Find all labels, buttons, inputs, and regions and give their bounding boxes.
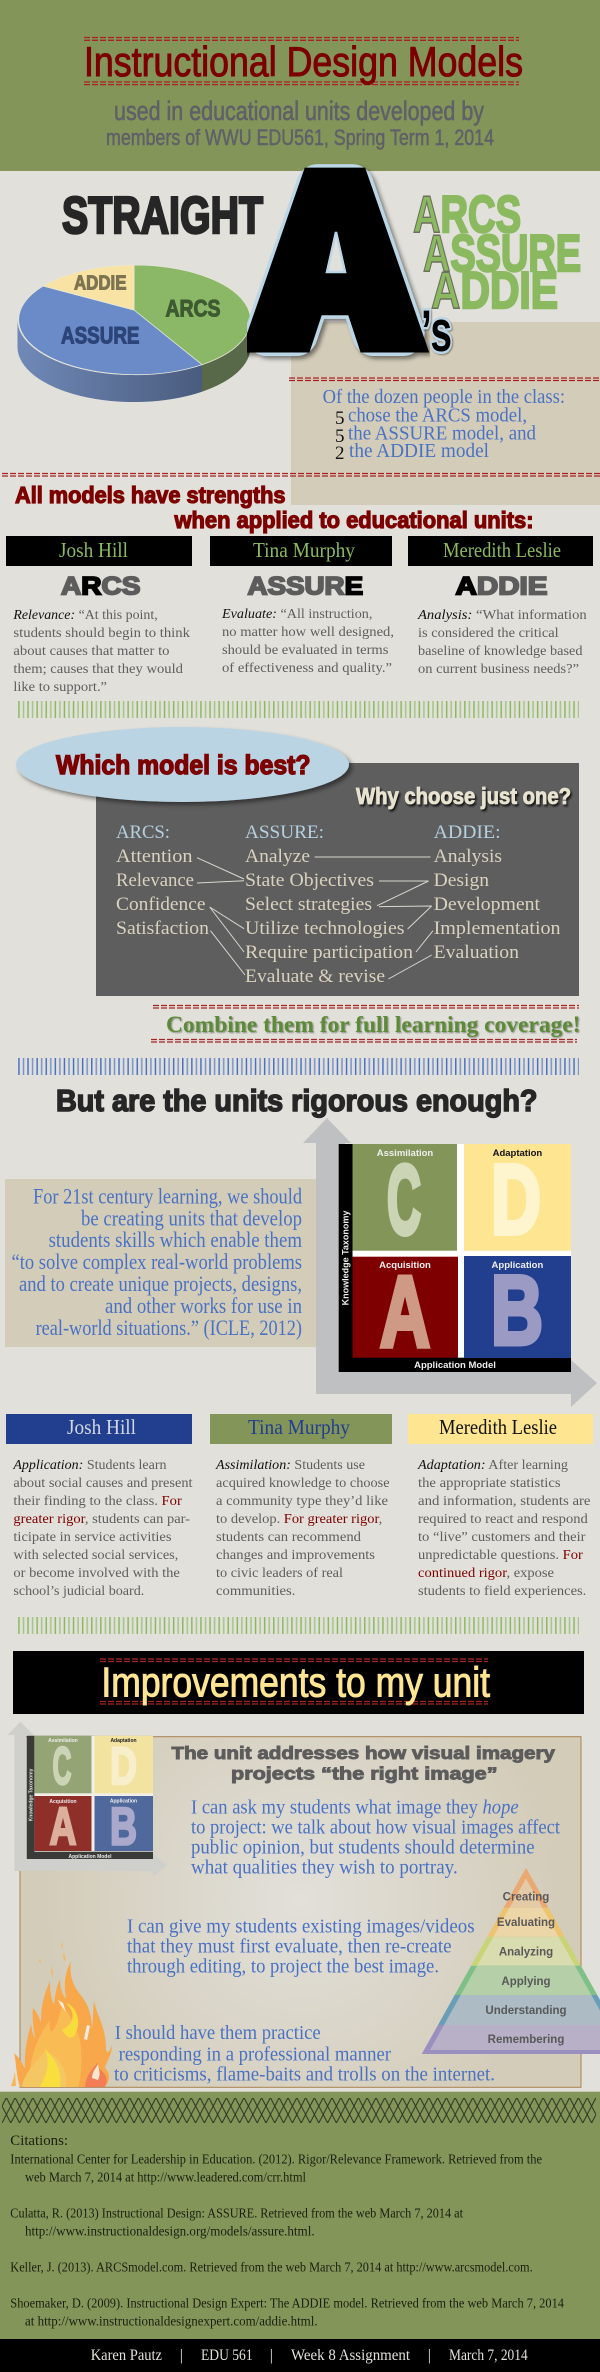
description: students can recommend [216,1530,361,1545]
column: ARCS: Attention [116,846,193,867]
quote: no matter how well designed, [222,625,394,640]
heading: strengths [15,482,534,533]
description: to develop. For greater rigor, [216,1512,382,1527]
small quadrant C: C [52,1737,72,1796]
icon: flames [11,1942,112,2087]
quote: students should begin to think [13,626,190,641]
quote [12,608,190,695]
small quadrant A: Acquisition [49,1799,77,1805]
name bar: Josh Hill [59,538,128,562]
paragraph: evaluate: that they must first evaluate, then re-create [127,1937,452,1958]
quote [221,607,394,676]
citation: Culatta [10,2205,463,2238]
quadrant D: Adaptation [493,1148,542,1159]
model name: ADDIE [456,572,548,600]
panel heading: The unit addresses how visual imagery [172,1743,555,1763]
citation: Keller: Keller, J. (2013). ARCSmodel.com. Retrieved from the web March 7, 2014 at http://www.arcsmodel.com. [10,2259,533,2274]
column: Meredith Leslie Adaptation [408,1414,593,1599]
heading banner: improvements: Improvements to my unit [101,1659,490,1706]
level: Analyzing [471,1937,581,1966]
small axis label: Knowledge Taxonomy: Knowledge Taxonomy [28,1768,34,1821]
quadrant A: A [380,1256,430,1368]
quadrant C: C [387,1144,421,1254]
quote box [5,1179,316,1347]
quote box: For 21st century learning, we should [33,1183,302,1208]
column: ARCS: Relevance [116,870,194,891]
description: Adaptation: After learning [417,1458,568,1473]
quadrant D [464,1144,571,1254]
description: unpredictable questions. For [418,1548,583,1563]
citation: Shoemaker [10,2295,564,2328]
model name: ASSUR E [248,572,363,600]
column: ARCS [116,822,210,939]
name bar: Tina Murphy [253,538,355,562]
quadrant D: D [491,1144,541,1254]
citations panel [0,2092,600,2339]
column: ADDIE: Implementation [434,918,561,939]
model name: ARCS [61,572,140,600]
column: ADDIE: Development [434,894,541,915]
citation: ICLE: web March 7, 2014 at http://www.leadered.com/crr.html [25,2169,306,2184]
quote box: and other works for use in [105,1293,302,1318]
name bar: Meredith Leslie [439,1415,557,1439]
subtitle: used in educational units developed by [114,96,484,126]
class statistics text: 5 [335,426,344,447]
panel heading: projects “the right image” [231,1763,498,1783]
column: Meredith Leslie ADDIE [408,536,593,677]
level: Understanding: Understanding [485,2005,567,2017]
arrows: rigor relevance axes [303,1118,597,1407]
citation: Culatta: http://www.instructionaldesign.org/models/assure.html. [25,2223,315,2238]
panel: model crosswalk [16,727,579,996]
quote box: and to create unique projects, designs, [19,1271,302,1296]
pie chart [17,265,251,402]
name bar [210,1414,392,1444]
description: greater rigor, students can par- [13,1512,190,1527]
paragraph: hope [191,1797,561,1878]
description: continued rigor, expose [418,1566,554,1581]
quadrant B: Application [492,1260,543,1271]
header band [0,0,600,171]
pie label: ADDIE: ADDIE [74,272,126,294]
quote box: real-world situations.” (ICLE, 2012) [36,1315,302,1340]
citation: Shoemaker: at http://www.instructionaldesignexpert.com/addie.html. [25,2313,318,2328]
heading: rigor: But are the units rigorous enough? [56,1083,538,1118]
small quadrant D [94,1736,153,1796]
pie label: ARCS: ARCS [166,296,220,322]
description: ticipate in service activities [13,1530,172,1545]
footer bar: | [428,2347,431,2364]
description: to “live” customers and their [418,1530,586,1545]
paragraph: evaluate: through editing, to project the best image. [127,1957,439,1978]
level: Creating [503,1868,549,1908]
footer bar: Karen Pautz [91,2347,162,2364]
column: ADDIE: Evaluation [434,942,520,963]
heading: strengths: All models have strengths [15,482,286,508]
description: and information, students are [418,1494,590,1509]
description [417,1458,590,1599]
quadrant A [352,1256,458,1368]
name bar: Meredith Leslie [443,538,561,562]
name bar: Josh Hill [67,1415,136,1439]
small quadrant C: Assimilation [48,1738,78,1744]
description: changes and improvements [216,1548,375,1563]
level: Applying: Applying [501,1976,551,1988]
level: Applying [455,1966,597,1995]
description: communities. [216,1584,295,1599]
column: ARCS: Confidence [116,894,206,915]
quote: Relevance: “At this point, [12,608,158,623]
small quadrant B: B [110,1798,137,1856]
citation: ICLE: International Center for Leadership in Education. (2012). Rigor/Relevance Framework. Retrieved from the [10,2151,542,2166]
name bar [6,536,192,566]
subheading: Why choose just one? [356,783,571,809]
heading banner: improvements [13,1651,584,1714]
column: ADDIE: Analysis [434,846,502,867]
tagline: combine: Combine them for full learning coverage! [166,1012,580,1037]
description: Application: Students learn [12,1458,167,1473]
footer bar: EDU 561 [201,2347,253,2364]
quote: on current business needs?” [418,662,579,677]
description: a community type they’d like [216,1494,388,1509]
pie label: ASSURE: ASSURE [61,322,140,350]
quadrant A: Acquisition [379,1260,431,1271]
level: Remembering: Remembering [488,2034,564,2046]
small axis label: Application Model: Application Model [68,1854,112,1860]
description [12,1458,193,1599]
quote box: “to solve complex real-world problems [12,1249,302,1274]
stacked model names: ARCS [413,186,521,244]
heading: strengths: when applied to educational units: [174,507,534,533]
paragraph: evaluate [127,1917,475,1978]
quadrant C: Assimilation [377,1148,433,1159]
description [215,1458,390,1599]
title: Instructional Design Models [84,38,523,85]
class statistics text: the ADDIE model [349,441,490,462]
quadrant B: B [491,1255,543,1365]
paragraph: trolls: to criticisms, flame-baits and trolls on the internet. [114,2065,495,2086]
column: ASSURE: Evaluate & revise [245,966,385,987]
paragraph: trolls: I should have them practice [115,2023,321,2044]
column: ARCS: ARCS: [116,822,170,843]
paragraph: evaluate: I can give my students existing images/videos [127,1917,475,1938]
quote: like to support.” [13,680,107,695]
stacked model names [413,186,581,320]
class statistics text [289,378,600,464]
column: ASSURE: Utilize technologies [245,918,404,939]
description: required to react and respond [418,1512,588,1527]
description: the appropriate statistics [418,1476,561,1491]
tagline: combine [151,1006,580,1042]
name bar [408,536,593,566]
level: Remembering [422,2025,600,2054]
class statistics text: 5 [335,408,344,429]
column: ASSURE: ASSURE: [245,822,324,843]
apostrophe s: ’s [421,299,452,364]
column: ADDIE: Design [434,870,490,891]
big letter A: A [262,141,408,378]
big letter A: A [262,141,408,378]
citation: Shoemaker: Shoemaker, D. (2009). Instructional Design Expert: The ADDIE model. Retrieved from the web March 7, 2014 [10,2295,564,2310]
small quadrant B [94,1796,153,1856]
column: ASSURE: State Objectives [245,870,374,891]
column: ASSURE [245,822,414,987]
paragraph: trolls: responding in a professional manner [119,2045,391,2066]
panel: unit improvements [11,1737,581,2087]
small quadrant B: Application [110,1798,137,1804]
small quadrant C [34,1736,92,1796]
rigor relevance quadrant chart [339,1144,571,1372]
column: Josh Hill ARCS [6,536,192,695]
column: ARCS: Satisfaction [116,918,210,939]
quote: Analysis: “What information [417,608,587,623]
column: ADDIE [434,822,561,963]
quadrant B [464,1255,571,1365]
pyramid: Bloom's taxonomy [422,1868,600,2054]
description: with selected social services, [13,1548,178,1563]
description: about social causes and present [13,1476,193,1491]
subtitle [106,96,494,150]
column: Tina Murphy ASSURE [210,536,394,676]
footer bar: | [270,2347,273,2364]
heading: STRAIGHT: STRAIGHT [62,187,263,245]
footer bar [0,2339,600,2372]
citation: ICLE [10,2151,542,2184]
quote: is considered the critical [418,626,559,641]
panel heading [172,1743,555,1783]
class statistics text: 2 [335,443,344,464]
quote box: students skills which enable them [49,1227,302,1252]
description: to civic leaders of real [216,1566,343,1581]
column: Josh Hill Application [6,1414,193,1599]
small quadrant A [34,1796,92,1856]
name bar [408,1414,593,1444]
column: ASSURE: Select strategies [245,894,372,915]
quote: Evaluate: “All instruction, [221,607,372,622]
column: ASSURE: Analyze [245,846,310,867]
stacked model names: ADDIE [431,262,558,320]
quote box: be creating units that develop [81,1206,302,1231]
column: Tina Murphy Assimilation [210,1414,392,1599]
description: acquired knowledge to choose [216,1476,390,1491]
description: school’s judicial board. [13,1584,144,1599]
footer bar: March 7, 2014 [449,2347,528,2364]
class statistics text: Of the dozen people in the class: [323,387,565,408]
quote: baseline of knowledge based [418,644,582,659]
level: Evaluating [487,1908,565,1937]
quote: should be evaluated in terms [222,643,388,658]
class statistics text: chose the ARCS model, [348,406,527,427]
connector lines [197,857,433,979]
callout: Which model is best: Which model is best? [56,750,310,780]
subtitle: members of WWU EDU561, Spring Term 1, 2014 [106,125,494,150]
quote [417,608,587,677]
quote: of effectiveness and quality.” [222,661,392,676]
citations heading: Citations: [10,2133,68,2149]
paragraph: hope: to project: we talk about how visual images affect [191,1817,561,1838]
description: their finding to the class. For [13,1494,182,1509]
name bar [6,1414,192,1444]
level: Evaluating: Evaluating [497,1917,555,1929]
description: students to field experiences. [418,1584,586,1599]
callout: Which model is best [16,727,349,802]
paragraph: trolls [114,2023,495,2086]
column: ASSURE: Require participation [245,942,414,963]
small quadrant D: D [110,1737,137,1796]
level: Analyzing: Analyzing [499,1946,553,1958]
axis label: Application Model: Application Model [414,1360,496,1371]
paragraph: hope: public opinion, but students should determine [191,1837,535,1858]
axis label: Knowledge Taxonomy: Knowledge Taxonomy [341,1211,351,1305]
small quadrant A: A [50,1798,76,1856]
level: Creating: Creating [503,1892,549,1904]
footer bar: Week 8 Assignment [291,2347,411,2364]
level: Understanding [438,1995,600,2025]
column: ADDIE: ADDIE: [434,822,501,843]
footer bar: | [180,2347,183,2364]
tan backdrop: class stats [291,322,600,505]
class statistics text: the ASSURE model, and [348,423,536,444]
description: Assimilation: Students use [215,1458,365,1473]
name bar [210,536,392,566]
arrows: small axes [8,1722,166,1877]
paragraph: hope: what qualities they wish to portray. [191,1857,458,1878]
description: or become involved with the [13,1566,180,1581]
name bar: Tina Murphy [248,1415,350,1439]
small quadrant D: Adaptation [110,1738,137,1744]
quote: them; causes that they would [13,662,183,677]
citation: Culatta: Culatta, R. (2013) Instructional Design: ASSURE. Retrieved from the web March 7, 2014 at [10,2205,463,2220]
small quadrant chart [27,1736,153,1860]
quadrant C [352,1144,457,1254]
quote: about causes that matter to [13,644,169,659]
paragraph: hope: I can ask my students what image they hope [191,1797,519,1818]
